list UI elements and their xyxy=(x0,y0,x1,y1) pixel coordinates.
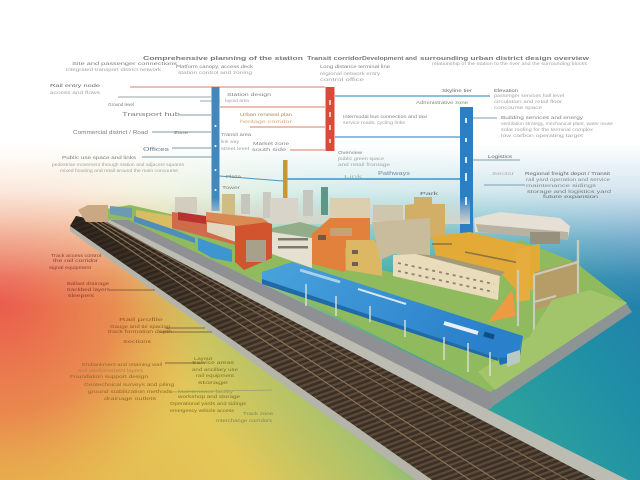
left upper labels: pedestrian movement through station and adjacent squares xyxy=(52,162,184,167)
right lawn xyxy=(478,290,627,390)
lower left label block on yellow: ground stabilization methods xyxy=(88,389,173,394)
lower left labels on red: Track access control xyxy=(51,253,101,258)
amber pole xyxy=(283,160,288,212)
orange-red station block xyxy=(206,212,272,270)
red pole xyxy=(326,87,334,151)
heading text xyxy=(143,56,590,62)
lower left labels on red xyxy=(49,253,111,298)
upper right labels: Administrative zone xyxy=(416,100,469,105)
lower middle label block on yellow: Interchange corridors xyxy=(216,418,273,423)
right labels: Logistics xyxy=(488,154,513,159)
lower left label block on yellow: drainage outlets xyxy=(104,396,156,401)
left upper labels: mixed housing and retail around the main concourse xyxy=(60,168,179,173)
lower left label block on yellow: Embankment and retaining wall xyxy=(82,362,162,367)
central tan block xyxy=(372,218,430,260)
upper right labels: control office xyxy=(320,77,365,82)
upper right labels: Park xyxy=(420,191,439,196)
white rotunda roof xyxy=(474,212,570,244)
heading text: Comprehensive planning of the station xyxy=(143,56,304,62)
lower left label block on yellow xyxy=(70,362,175,401)
upper right labels: regional network entry xyxy=(320,71,381,76)
upper right labels: Long distance terminal line xyxy=(320,64,391,69)
upper right labels: and retail frontage xyxy=(338,162,391,167)
lower middle labels on orange: Rail profile xyxy=(119,317,164,322)
lower left labels on red: signal equipment xyxy=(49,265,92,270)
left upper labels: Public use space and links xyxy=(62,155,137,160)
colored leader lines xyxy=(118,87,525,185)
far left low buildings xyxy=(78,205,236,262)
blue pole left xyxy=(212,87,220,211)
grey steel frame xyxy=(518,240,578,332)
upper middle labels: Market zone xyxy=(253,141,290,146)
lower middle label block on yellow: Maintenance facility xyxy=(178,389,234,394)
upper middle labels: station control and zoning xyxy=(178,70,253,75)
left upper labels xyxy=(50,61,189,173)
upper right labels: Pathways xyxy=(378,171,411,177)
upper right labels: service roads, cycling links xyxy=(343,120,405,125)
lower middle label block on yellow: storage xyxy=(198,380,229,385)
lower middle label block on yellow xyxy=(170,356,274,423)
yellow office complex xyxy=(432,232,578,322)
yellow building xyxy=(346,240,382,276)
right labels: passenger services hall level xyxy=(494,93,564,98)
right labels: Building services and energy xyxy=(501,115,584,120)
lower left labels on red: trackbed layers xyxy=(67,287,111,292)
upper middle labels: link way xyxy=(221,139,240,144)
lower left labels on red: sleepers xyxy=(68,293,94,298)
upper right labels: Overview xyxy=(338,150,363,155)
cream building xyxy=(272,222,322,268)
canopy columns xyxy=(306,284,490,376)
right labels: Elevation xyxy=(494,88,519,93)
lower left labels on red: Ballast drainage xyxy=(67,281,110,286)
blue pole right xyxy=(460,107,473,233)
lower middle label block on yellow: rail equipment xyxy=(196,373,235,378)
lower left label block on yellow: Foundation support design xyxy=(70,374,148,380)
upper middle labels: Urban renewal plan xyxy=(240,112,293,117)
heading text: surrounding urban district design overview xyxy=(420,56,590,62)
heading text: Development and xyxy=(362,56,418,62)
upper middle labels: Tower xyxy=(222,185,241,190)
right labels: circulation and retail floor xyxy=(494,99,563,104)
upper middle labels: heritage corridor xyxy=(240,119,293,124)
lower middle labels on orange: track formation depth xyxy=(108,329,173,334)
right labels: rail yard operation and service xyxy=(526,177,611,182)
upper middle labels: Plaza xyxy=(226,174,242,179)
right labels: future expansion xyxy=(543,194,599,199)
left upper labels: Commercial district / Road xyxy=(73,130,148,136)
upper right labels: Link xyxy=(344,174,364,179)
upper middle labels: street level xyxy=(221,146,249,151)
railway track xyxy=(70,216,596,480)
lower left label block on yellow: Geotechnical surveys and piling xyxy=(84,382,175,387)
right labels: maintenance sidings xyxy=(526,183,596,188)
left upper labels: Ground level xyxy=(108,102,134,107)
upper middle labels: Transit area xyxy=(221,132,252,137)
lower middle label block on yellow: workshop and storage xyxy=(178,394,241,399)
lower left labels on red: the rail corridor xyxy=(53,258,99,263)
blue station canopy xyxy=(262,262,523,367)
right labels: Sector xyxy=(492,171,515,176)
distant skyline xyxy=(170,187,470,238)
upper right labels: public green space xyxy=(338,156,385,161)
right labels: low carbon operating target xyxy=(501,133,584,138)
lower middle labels on orange: Sections xyxy=(123,339,152,344)
right labels: Regional freight depot / Transit xyxy=(525,171,611,176)
upper right labels: Skyline tier xyxy=(442,88,473,93)
upper middle labels: Station design xyxy=(227,92,272,97)
upper right labels xyxy=(320,61,587,196)
right labels: solar roofing for the terminal complex xyxy=(501,127,594,132)
lower middle label block on yellow: Operational yards and sidings xyxy=(170,401,247,406)
base platform edge xyxy=(480,303,632,408)
right labels: storage and logistics yard xyxy=(527,189,612,194)
right labels xyxy=(488,88,614,199)
upper middle labels: layout area xyxy=(225,98,250,103)
left upper labels: Rail entry node xyxy=(50,83,101,88)
heading text: Transit corridor xyxy=(307,56,363,62)
left upper labels: Transport hub xyxy=(122,112,180,118)
lower middle label block on yellow: emergency vehicle access xyxy=(170,408,235,413)
lower left label block on yellow: soil reinforcement layers xyxy=(78,368,143,373)
light ballast strip xyxy=(100,220,628,480)
upper right labels: Intermodal bus connection and taxi xyxy=(343,114,427,119)
right labels: concourse space xyxy=(494,105,543,110)
lower middle label block on yellow: Layout xyxy=(194,356,213,361)
left upper labels: Site and passenger connections xyxy=(72,61,178,66)
upper middle labels: south side xyxy=(252,147,287,152)
upper middle labels xyxy=(176,64,293,190)
left upper labels: Offices xyxy=(143,147,170,153)
lower middle labels on orange xyxy=(108,317,173,344)
track leader lines xyxy=(110,290,272,392)
cream long building xyxy=(393,254,505,300)
upper right labels: relationship of the station to the river and the surrounding blocks xyxy=(432,61,587,66)
left upper labels: Zone xyxy=(174,130,189,135)
left upper labels: access and flows xyxy=(50,90,100,95)
road strip xyxy=(100,220,492,417)
upper middle labels: Platform canopy, access deck xyxy=(176,64,254,69)
lower middle label block on yellow: Track zone xyxy=(243,411,274,416)
right labels: ventilation strategy, mechanical plant, water reuse xyxy=(501,121,614,126)
lower middle label block on yellow: Service areas xyxy=(192,360,234,365)
orange tower block xyxy=(312,218,370,272)
base platform green xyxy=(88,205,627,392)
lower middle label block on yellow: and ancillary use xyxy=(192,367,239,372)
lower middle labels on orange: Gauge and tie spacing xyxy=(110,324,171,329)
left upper labels: integrated transport district network xyxy=(66,67,162,72)
